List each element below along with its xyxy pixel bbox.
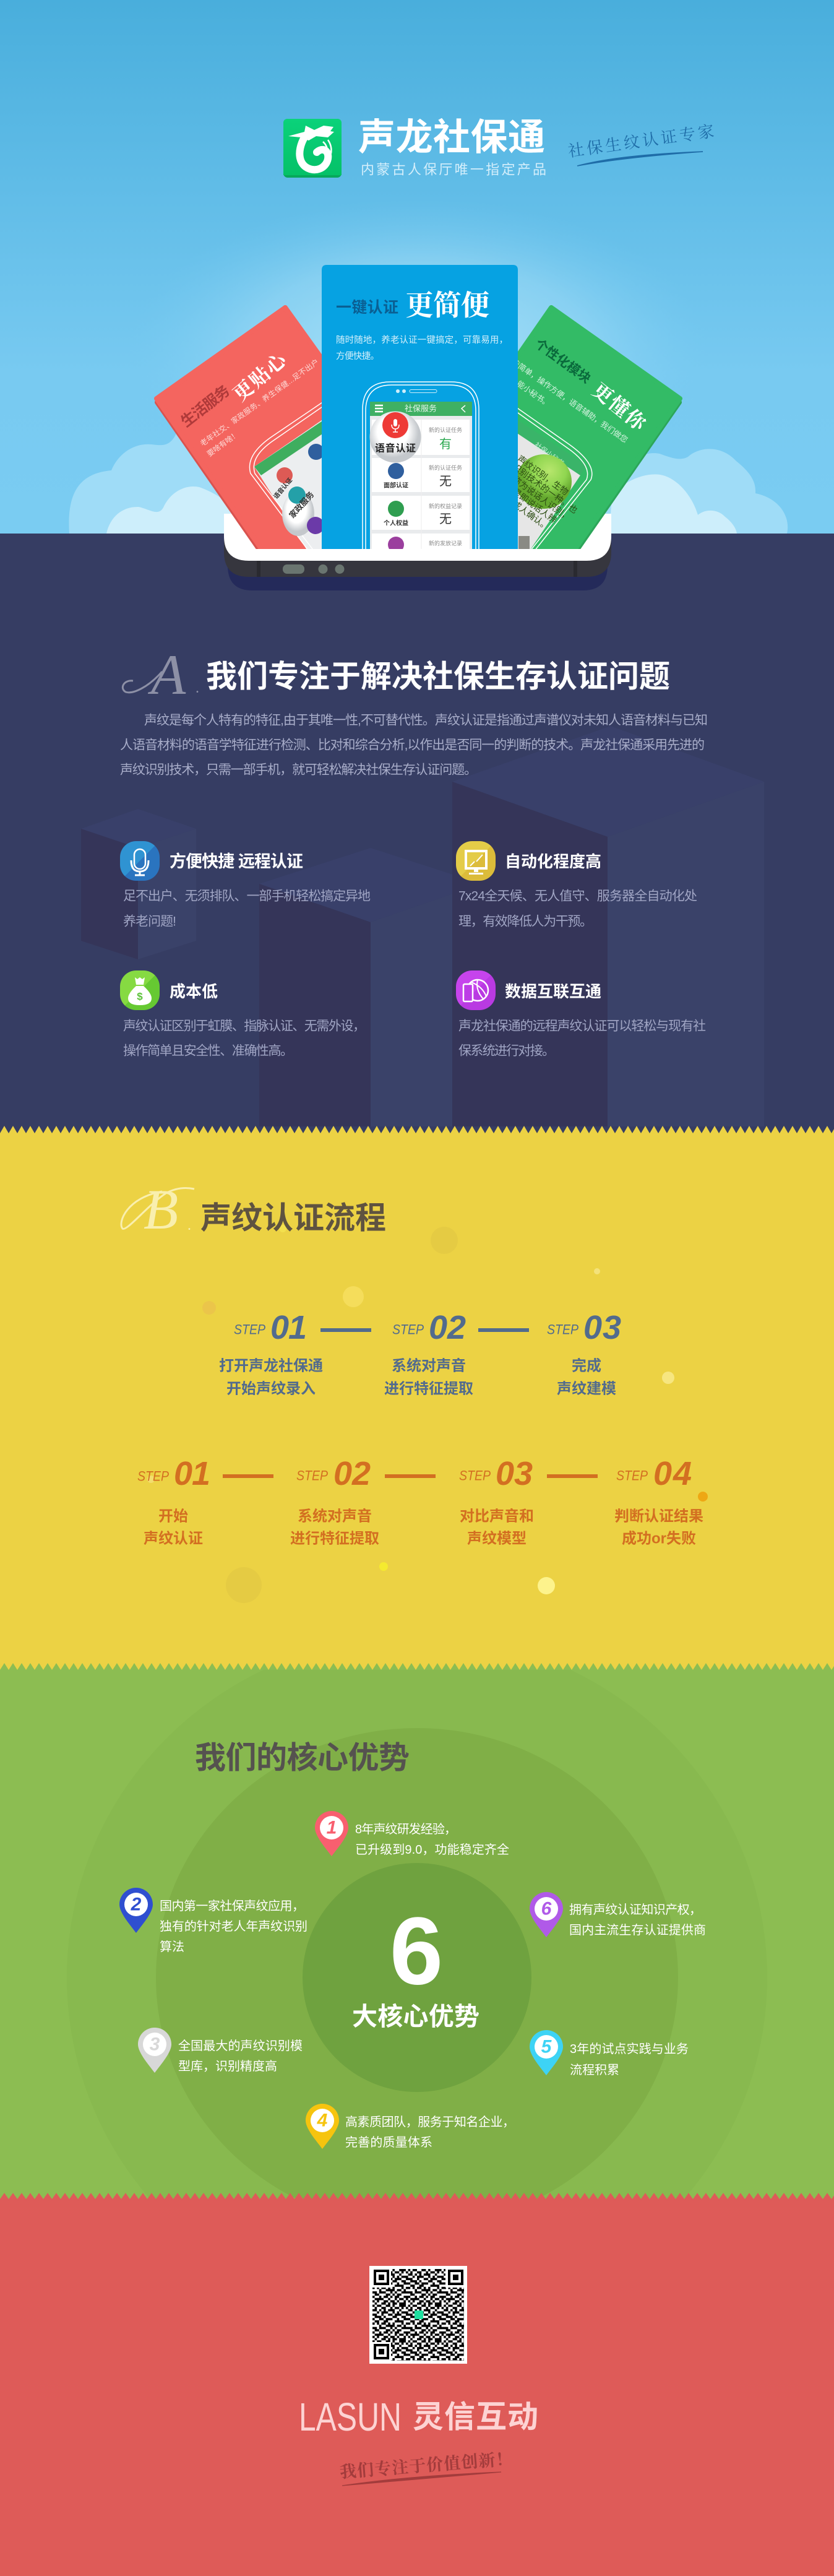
step 2 enrollment: STEP — [392, 1322, 424, 1337]
step 3 enrollment: STEP — [547, 1322, 578, 1337]
section B heading — [121, 1178, 386, 1241]
icon: right front cloud — [609, 474, 737, 534]
tablet home buttons — [283, 564, 344, 574]
feature: low cost: 成本低 — [170, 982, 218, 1001]
pin 1: 1 — [327, 1817, 337, 1838]
blue card handwritten slogan: 更简便 — [405, 283, 489, 324]
script letter A — [123, 643, 199, 706]
red card — [154, 305, 322, 549]
step 4 authentication: 成功or失败 — [622, 1530, 696, 1547]
step 1 authentication: 声纹认证 — [144, 1530, 203, 1547]
green card phone — [518, 408, 593, 549]
step 3 enrollment: 03 — [583, 1309, 621, 1346]
step 2 authentication: 系统对声音 — [298, 1508, 372, 1525]
blue card description: 随时随地，养老认证一键搞定，可靠易用， — [336, 335, 508, 345]
green card phone: 声纹识别，生物 — [515, 454, 570, 497]
advantage 6: 拥有声纹认证知识产权， — [569, 1903, 702, 1917]
feature: convenient remote auth: 养老问题! — [123, 915, 176, 928]
phone in blue card: 新的权益记录 — [429, 503, 462, 509]
section: red footer background — [0, 2193, 834, 2576]
red card phone — [249, 402, 322, 549]
intro paragraph: 声纹识别技术，只需一部手机，就可轻松解决社保生存认证问题。 — [120, 763, 477, 777]
step 3 enrollment — [547, 1309, 621, 1398]
centre number: 大核心优势 — [352, 2002, 479, 2031]
phone in blue card: 有 — [439, 437, 452, 451]
voice auth sphere — [370, 411, 421, 463]
process row: voiceprint authentication — [137, 1455, 703, 1547]
step 3 authentication: 03 — [496, 1455, 533, 1492]
icon: left front cloud — [106, 486, 260, 534]
phone in blue card: 无 — [439, 475, 452, 488]
step 1 enrollment: 打开声龙社保通 — [219, 1358, 323, 1374]
script letter B — [121, 1178, 194, 1241]
step 3 authentication: 对比声音和 — [460, 1508, 534, 1525]
advantage 3 — [138, 2028, 303, 2073]
step 2 authentication: 进行特征提取 — [290, 1530, 379, 1547]
phone in blue card: 社保服务 — [405, 404, 437, 413]
blue centre card — [322, 265, 518, 557]
section B heading: 声纹认证流程 — [200, 1201, 386, 1235]
feature: high automation: 理，有效降低人为干预。 — [458, 915, 593, 928]
advantage 2: 独有的针对老人年声纹识别 — [160, 1919, 307, 1934]
advantage 3: 全国最大的声纹识别模 — [178, 2039, 303, 2053]
centre number — [352, 1898, 479, 2031]
step 2 authentication: 02 — [333, 1455, 371, 1492]
script letter A: . — [196, 680, 199, 696]
feature: data interconnect: 保系统进行对接。 — [458, 1044, 555, 1058]
green card phone: 或人确认。 — [510, 499, 551, 532]
green card description: 的全能小秘书。 — [502, 370, 552, 408]
pin 3 — [138, 2028, 171, 2073]
tablet shadow — [228, 545, 608, 590]
step 2 authentication: STEP — [296, 1468, 328, 1483]
feature: convenient remote auth: 足不出户、无须排队、一部手机轻松搞定异地 — [123, 889, 371, 904]
feature: high automation — [456, 841, 697, 928]
company logo text: 灵信互动 — [413, 2400, 538, 2434]
advantage 5: 3年的试点实践与业务 — [570, 2042, 689, 2056]
icon: left back cloud — [69, 433, 260, 534]
step 4 authentication: STEP — [616, 1468, 648, 1483]
step 3 authentication — [459, 1455, 534, 1547]
section: yellow process background — [0, 1126, 834, 1672]
pin 2: 2 — [131, 1894, 142, 1915]
feature: low cost: 声纹认证区别于虹膜、指脉认证、无需外设， — [123, 1019, 366, 1034]
section: dark intro background — [0, 534, 834, 1134]
phone app header — [370, 402, 472, 416]
pin 6 — [530, 1892, 563, 1937]
QR code — [369, 2266, 467, 2364]
icon: right back cloud — [594, 449, 788, 534]
script letter B: B — [144, 1178, 178, 1241]
tablet device — [224, 514, 611, 590]
process row: voiceprint enrollment — [219, 1309, 621, 1398]
pin 4 — [306, 2104, 339, 2149]
icon: microphone — [120, 841, 160, 881]
green card handwritten slogan: 更懂你 — [587, 375, 655, 438]
advantage 2 — [119, 1888, 307, 1954]
icon: monitor — [456, 841, 496, 881]
product name: 声龙社保通 — [358, 116, 545, 158]
phone in blue card: 新的发放记录 — [429, 540, 462, 547]
step 1 enrollment — [219, 1309, 323, 1398]
green card phone: 识别技术的一种。也 — [510, 462, 580, 516]
advantage 1: 8年声纹研发经验， — [355, 1822, 457, 1836]
step 3 enrollment: 完成 — [572, 1358, 601, 1374]
step 4 authentication: 判断认证结果 — [614, 1508, 703, 1525]
blue card description — [336, 335, 508, 361]
centre number: 6 — [390, 1898, 443, 2004]
handwritten tagline: 社保生纹认证专家 — [566, 119, 715, 162]
icon: phone and globe — [456, 970, 496, 1010]
handwritten motto: 我们专注于价值创新！ — [338, 2445, 514, 2483]
phone in blue card: 面部认证 — [384, 482, 408, 489]
red card description: 老年社交、家政服务、养生保健...足不出户 — [198, 357, 320, 448]
red card heading: 生活服务 — [178, 383, 233, 431]
feature: data interconnect — [456, 970, 706, 1058]
pin 6: 6 — [541, 1899, 552, 1919]
green card phone: 称为说话人识别， — [510, 474, 572, 522]
intro paragraph: 声纹是每个人特有的特征,由于其唯一性,不可替代性。声纹认证是指通过声谱仪对未知人语音材料与已知 — [144, 713, 708, 728]
pin 1 — [315, 1811, 348, 1856]
section: hero sky header — [0, 0, 834, 534]
advantage 3: 型库，识别精度高 — [178, 2059, 277, 2073]
pin 5: 5 — [541, 2036, 552, 2057]
green card heading: 个性化模块 — [532, 337, 593, 386]
advantage 4: 高素质团队，服务于知名企业， — [345, 2115, 515, 2129]
step 2 enrollment: 系统对声音 — [392, 1358, 466, 1374]
section A heading: 我们专注于解决社保生存认证问题 — [206, 659, 670, 694]
feature: convenient remote auth: 方便快捷 远程认证 — [170, 852, 303, 871]
pin 4: 4 — [317, 2111, 328, 2130]
green card phone: 社保小秘书 — [533, 441, 565, 467]
advantage 2: 国内第一家社保声纹应用， — [160, 1899, 304, 1913]
red card phone: 家政服务 — [287, 490, 316, 520]
feature: high automation: 7x24全天候、无人值守、服务器全自动化处 — [458, 889, 697, 904]
blue card description: 方便快捷。 — [336, 351, 379, 361]
icon: money bag — [120, 970, 160, 1010]
script letter B: . — [187, 1217, 191, 1234]
advantages title: 我们的核心优势 — [195, 1740, 410, 1775]
advantage 1 — [315, 1811, 509, 1857]
company logo text: LASUN — [299, 2395, 402, 2439]
step 2 enrollment — [384, 1309, 473, 1398]
advantage 6 — [530, 1892, 706, 1937]
section: green advantages background — [0, 1663, 834, 2199]
green card phone: 是即说话人辨 — [510, 486, 559, 525]
intro paragraph — [120, 713, 708, 777]
section A heading — [123, 643, 670, 706]
phone in blue card: 个人权益 — [384, 519, 408, 527]
script letter A: A — [147, 643, 186, 706]
phone in blue card — [363, 382, 479, 557]
step 1 authentication: 开始 — [158, 1508, 188, 1525]
step 3 enrollment: 声纹建模 — [557, 1380, 616, 1398]
phone in blue card: 无 — [439, 512, 452, 526]
step 2 enrollment: 02 — [429, 1309, 466, 1346]
tablet bezel — [224, 538, 611, 577]
step 3 authentication: 声纹模型 — [467, 1530, 527, 1547]
step 1 authentication: 01 — [174, 1455, 210, 1492]
red card phone: 语音认证 — [272, 477, 294, 501]
building block middle — [259, 848, 481, 1126]
blue card heading: 一键认证 — [336, 299, 398, 316]
feature: data interconnect: 声龙社保通的远程声纹认证可以轻松与现有社 — [458, 1019, 706, 1034]
advantage 2: 算法 — [160, 1940, 184, 1954]
advantage 4: 完善的质量体系 — [345, 2135, 432, 2150]
step 2 authentication — [290, 1455, 379, 1547]
phone in blue card: 新的认证任务 — [429, 426, 462, 433]
step 3 authentication: STEP — [459, 1468, 491, 1483]
step 1 authentication: STEP — [137, 1468, 169, 1484]
tablet white screen — [224, 514, 611, 561]
phone app rows — [372, 420, 470, 550]
logo icon — [283, 119, 342, 178]
step 4 authentication: 04 — [653, 1455, 692, 1492]
green card — [518, 305, 682, 549]
feature: low cost — [120, 970, 366, 1058]
intro paragraph: 人语音材料的语音学特征进行检测、比对和综合分析,以作出是否同一的判断的技术。声龙社保通采用先进的 — [120, 738, 705, 753]
icon: money bag: $ — [137, 990, 143, 1003]
advantage 4 — [306, 2104, 515, 2150]
phone in blue card: 新的认证任务 — [429, 464, 462, 471]
red card description: 要啥有啥！ — [205, 429, 241, 459]
logo — [283, 116, 715, 178]
step 1 enrollment: 开始声纹录入 — [226, 1380, 316, 1398]
step 4 authentication — [614, 1455, 703, 1547]
advantage 1: 已升级到9.0，功能稳定齐全 — [355, 1843, 509, 1857]
red card handwritten slogan: 更贴心 — [226, 344, 293, 407]
feature: convenient remote auth — [120, 841, 371, 928]
pin 5 — [530, 2030, 563, 2075]
company logo text — [299, 2395, 538, 2439]
advantage 5 — [530, 2030, 689, 2077]
step 1 enrollment: STEP — [234, 1322, 265, 1337]
advantage 5: 流程积累 — [570, 2063, 619, 2077]
building block left — [81, 809, 196, 959]
voice auth sphere: 语音认证 — [375, 442, 416, 454]
QR finder patterns — [371, 2268, 465, 2362]
step 1 enrollment: 01 — [270, 1309, 307, 1346]
advantage 6: 国内主流生存认证提供商 — [569, 1923, 706, 1937]
pin 3: 3 — [150, 2034, 160, 2055]
green card description: 功能简单，操作方便，语音辅助，我们做您 — [504, 352, 630, 444]
feature: high automation: 自动化程度高 — [505, 852, 601, 871]
step 1 authentication — [137, 1455, 210, 1547]
feature: data interconnect: 数据互联互通 — [505, 982, 601, 1001]
product subtitle: 内蒙古人保厅唯一指定产品 — [361, 162, 546, 177]
step 2 enrollment: 进行特征提取 — [384, 1380, 473, 1398]
pin 2 — [119, 1888, 153, 1933]
building block right — [452, 726, 764, 1126]
feature: low cost: 操作简单且安全性、准确性高。 — [123, 1044, 293, 1058]
